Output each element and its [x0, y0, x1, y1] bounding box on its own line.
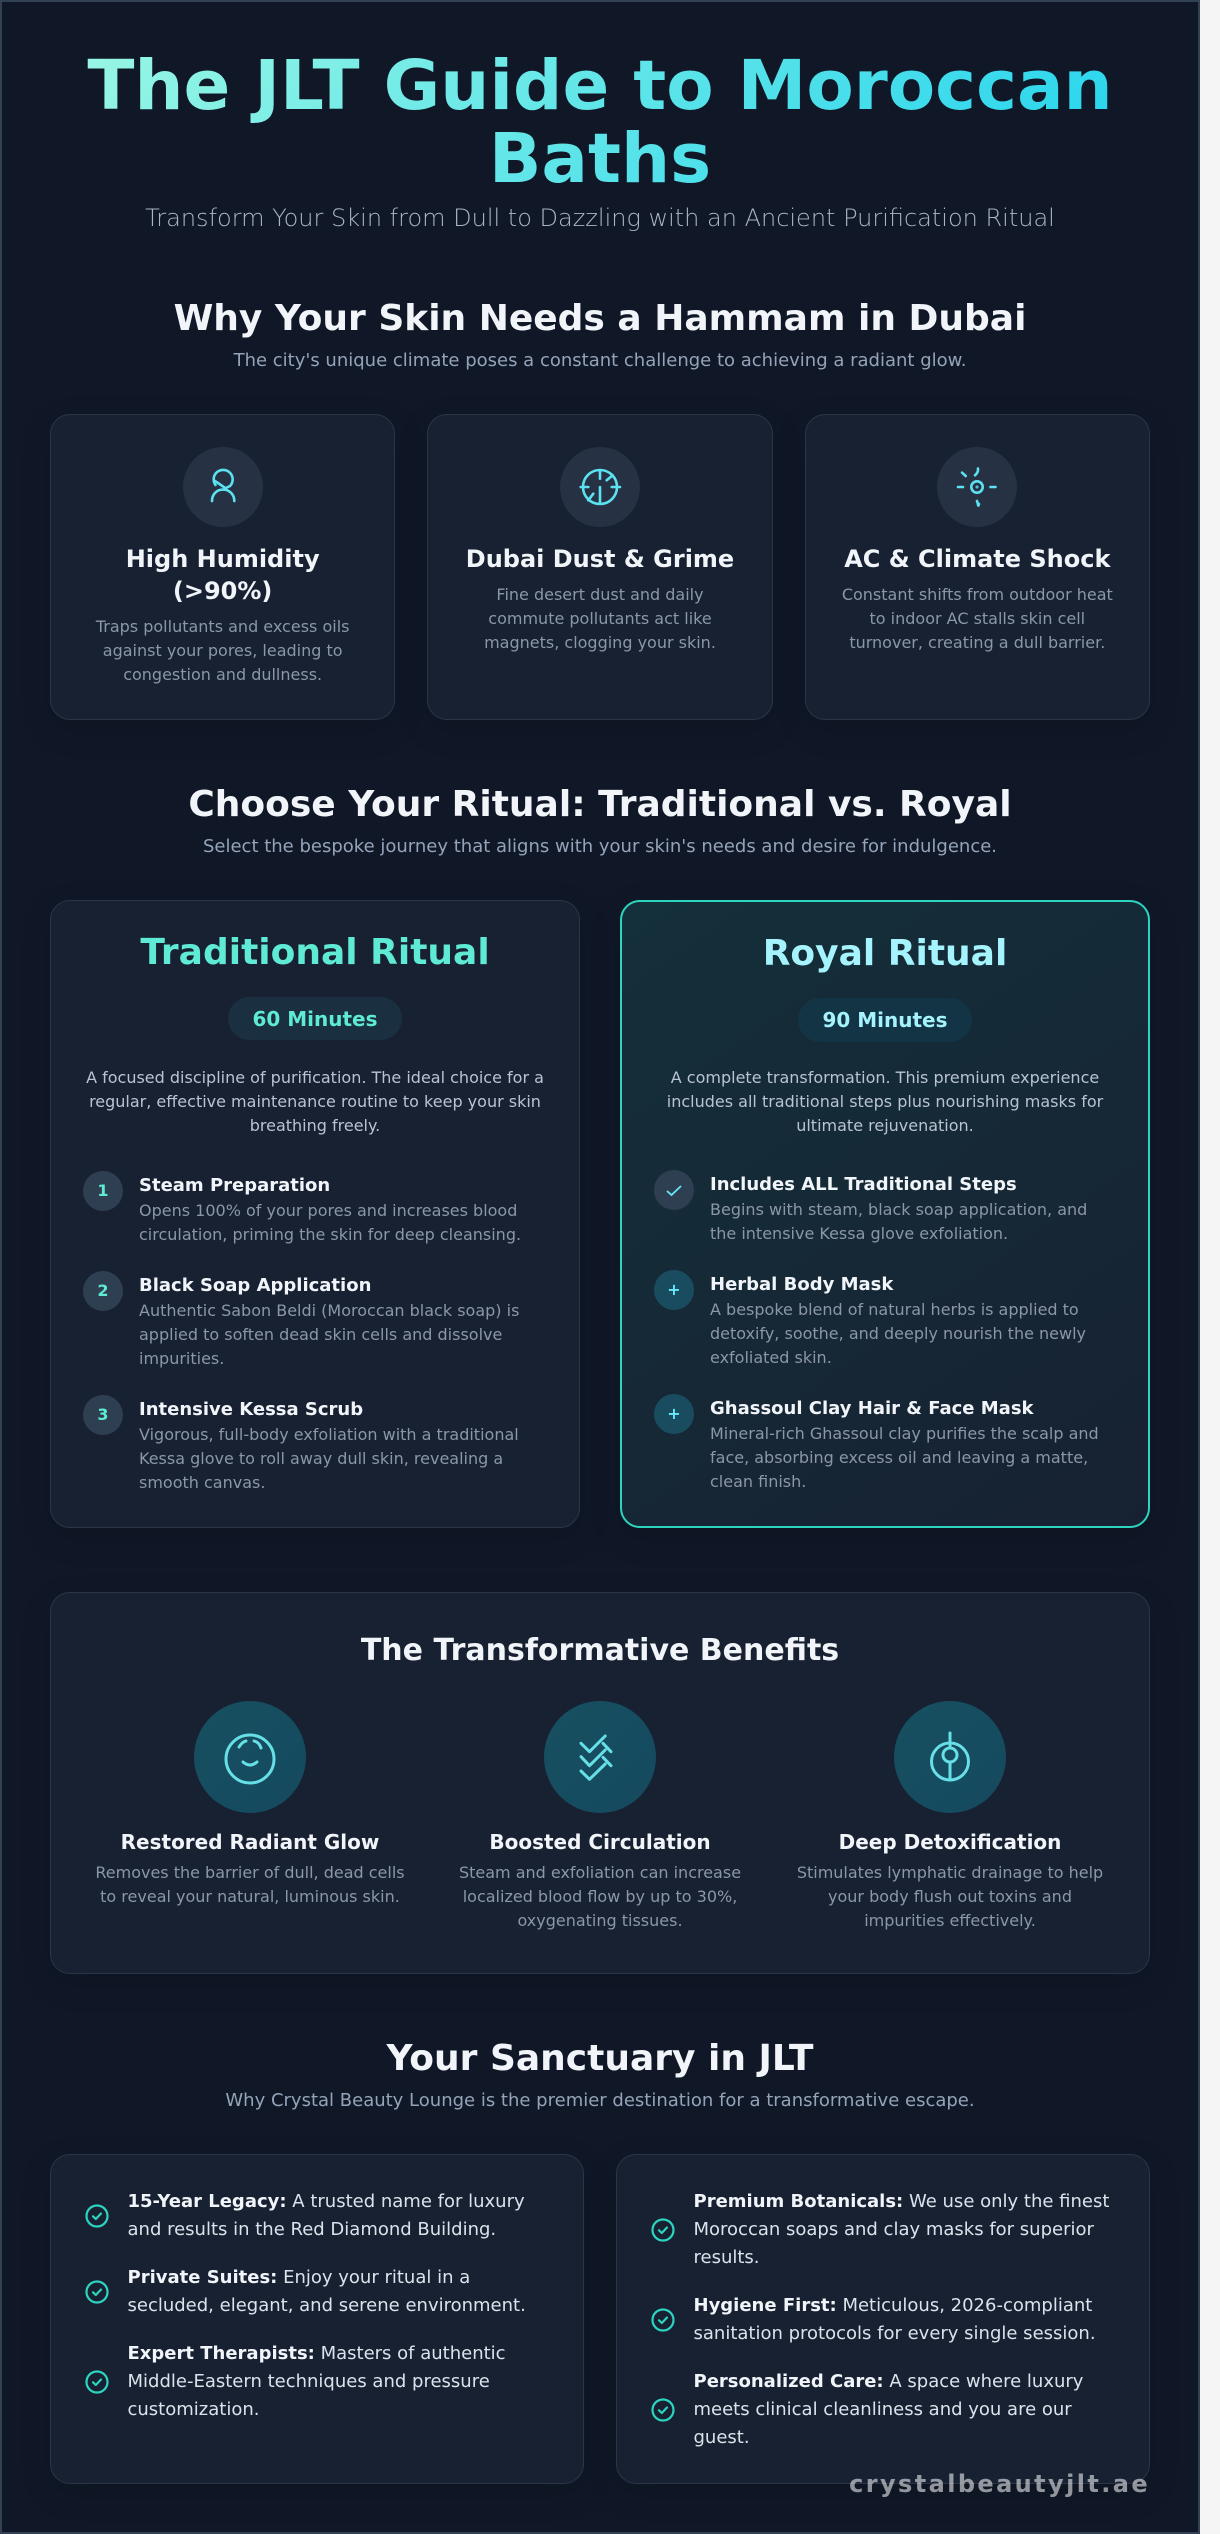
icon: plus: + — [667, 1280, 681, 1299]
benefit text: localized blood flow by up to 30%, — [463, 1887, 737, 1906]
heading: choose your ritual: Choose Your Ritual: Traditional vs. Royal — [188, 784, 1012, 825]
title: The JLT Guide to Moroccan — [87, 46, 1113, 126]
step text: impurities. — [139, 1349, 224, 1368]
item: personalized care: Personalized Care: A space where luxury — [694, 2371, 1083, 2392]
benefit title: Restored Radiant Glow — [121, 1830, 379, 1854]
icon: plus: + — [667, 1404, 681, 1423]
text: ac climate shock: Constant shifts from outdoor heat — [842, 585, 1113, 604]
step text — [710, 1424, 1099, 1491]
item: private suites: secluded, elegant, and serene environment. — [128, 2295, 526, 2316]
step text: exfoliated skin. — [710, 1348, 832, 1367]
item: hygiene first: Hygiene First: Meticulous, 2026-compliant — [694, 2295, 1092, 2316]
step title: Steam Preparation — [139, 1175, 330, 1196]
item: personalized care: meets clinical cleanliness and you are our — [694, 2399, 1072, 2420]
step: black soap — [83, 1271, 519, 1368]
item: expert therapists — [85, 2343, 506, 2420]
heading: high humidity: (>90%) — [173, 577, 272, 605]
heading: benefits: The Transformative Benefits — [361, 1633, 839, 1668]
subheading: sanctuary: Why Crystal Beauty Lounge is the premier destination for a transformative escape. — [225, 2090, 975, 2111]
step: kessa scrub — [83, 1395, 519, 1492]
step text — [139, 1301, 519, 1368]
text: high humidity: against your pores, leading to — [103, 641, 343, 660]
icon: check — [654, 1170, 694, 1210]
benefit text: oxygenating tissues. — [517, 1911, 683, 1930]
step text: applied to soften dead skin cells and dissolve — [139, 1325, 502, 1344]
panel: traditional ritual — [50, 900, 580, 1528]
text: dubai dust — [484, 585, 716, 652]
text: dubai dust: Fine desert dust and daily — [496, 585, 704, 604]
benefit title: Boosted Circulation — [489, 1830, 711, 1854]
step text — [139, 1425, 519, 1492]
icon: sun climate — [937, 447, 1017, 527]
icon: dust globe — [560, 447, 640, 527]
icon: face — [194, 1701, 306, 1813]
step: herbal body mask — [654, 1270, 1086, 1367]
text: dubai dust: magnets, clogging your skin. — [484, 633, 716, 652]
benefit: detox — [797, 1701, 1103, 1930]
text: royal description: A complete transformation. This premium experience — [671, 1068, 1099, 1087]
step text — [710, 1200, 1087, 1243]
step text — [710, 1300, 1086, 1367]
benefit text — [95, 1863, 405, 1906]
heading: traditional ritual: Traditional Ritual — [140, 932, 490, 973]
text: royal description — [667, 1068, 1104, 1135]
heading: why your skin needs a hammam: Why Your Skin Needs a Hammam in Dubai — [174, 298, 1026, 339]
item: expert therapists: Expert Therapists: Masters of authentic — [128, 2343, 506, 2364]
text: high humidity: congestion and dullness. — [123, 665, 322, 684]
step: includes all — [654, 1170, 1087, 1243]
icon: plus — [654, 1270, 694, 1310]
item: personalized care: guest. — [694, 2427, 750, 2448]
title — [80, 50, 1120, 196]
step title: Intensive Kessa Scrub — [139, 1399, 363, 1420]
subtitle: Transform Your Skin from Dull to Dazzling with an Ancient Purification Ritual — [145, 204, 1055, 232]
watermark: crystalbeautyjlt.ae — [849, 2470, 1150, 2498]
text: dubai dust: commute pollutants act like — [488, 609, 712, 628]
text: high humidity — [96, 617, 349, 684]
step text: smooth canvas. — [139, 1473, 265, 1492]
step text — [139, 1201, 521, 1244]
heading: royal ritual: Royal Ritual — [763, 933, 1007, 974]
panel: royal ritual — [620, 900, 1150, 1528]
item: hygiene first — [651, 2295, 1096, 2344]
title: Baths — [489, 119, 711, 199]
step title: Black Soap Application — [139, 1275, 371, 1296]
icon: chevrons — [544, 1701, 656, 1813]
panel: transformative benefits — [50, 1592, 1150, 1974]
item: personalized care — [651, 2371, 1083, 2448]
text: ac climate shock: turnover, creating a dull barrier. — [849, 633, 1105, 652]
icon: detox drop — [894, 1701, 1006, 1813]
step title: Ghassoul Clay Hair & Face Mask — [710, 1398, 1034, 1419]
panel: dubai dust — [427, 414, 773, 720]
benefit text: Stimulates lymphatic drainage to help — [797, 1863, 1103, 1882]
panel: sanctuary left list — [50, 2154, 584, 2484]
step text: the intensive Kessa glove exfoliation. — [710, 1224, 1008, 1243]
item: expert therapists: Middle-Eastern techniques and pressure — [128, 2371, 490, 2392]
step title: Includes ALL Traditional Steps — [710, 1174, 1017, 1195]
step text: face, absorbing excess oil and leaving a matte, — [710, 1448, 1088, 1467]
icon: humidity person — [183, 447, 263, 527]
item: legacy: and results in the Red Diamond Building. — [128, 2219, 496, 2240]
benefit text: impurities effectively. — [864, 1911, 1036, 1930]
badge: 60 minutes — [228, 997, 402, 1040]
heading: dubai dust: Dubai Dust & Grime — [466, 545, 734, 573]
heading: ac climate shock: AC & Climate Shock — [844, 545, 1110, 573]
number 3 — [83, 1395, 123, 1435]
step text: Mineral-rich Ghassoul clay purifies the scalp and — [710, 1424, 1099, 1443]
item: private suites — [85, 2267, 526, 2316]
text: high humidity: Traps pollutants and excess oils — [96, 617, 349, 636]
heading: sanctuary: Your Sanctuary in JLT — [387, 2038, 813, 2079]
item: private suites: Private Suites: Enjoy your ritual in a — [128, 2267, 470, 2288]
text: traditional description: regular, effective maintenance routine to keep your skin — [89, 1092, 541, 1111]
step: ghassoul mask — [654, 1394, 1099, 1491]
panel: ac climate shock — [805, 414, 1150, 720]
benefit text: to reveal your natural, luminous skin. — [100, 1887, 400, 1906]
subheading: climate: The city's unique climate poses a constant challenge to achieving a radiant glow. — [234, 350, 966, 371]
number 2: 2 — [97, 1281, 109, 1300]
number 3: 3 — [97, 1405, 109, 1424]
item: hygiene first: sanitation protocols for every single session. — [694, 2323, 1096, 2344]
benefit text — [459, 1863, 741, 1930]
benefit: circulation — [459, 1701, 741, 1930]
text: traditional description: A focused discipline of purification. The ideal choice for a — [86, 1068, 544, 1087]
benefit text — [797, 1863, 1103, 1930]
benefit text: Removes the barrier of dull, dead cells — [95, 1863, 405, 1882]
item: expert therapists: customization. — [128, 2399, 259, 2420]
number 1 — [83, 1171, 123, 1211]
step text: Vigorous, full-body exfoliation with a traditional — [139, 1425, 519, 1444]
heading: high humidity: High Humidity — [126, 545, 320, 573]
item: premium botanicals: Premium Botanicals: We use only the finest — [694, 2191, 1109, 2212]
icon: plus — [654, 1394, 694, 1434]
benefit text: your body flush out toxins and — [828, 1887, 1072, 1906]
badge: 60 minutes: 60 Minutes — [252, 1007, 378, 1031]
badge: 90 minutes — [798, 998, 972, 1042]
item: legacy: 15-Year Legacy: A trusted name for luxury — [128, 2191, 525, 2212]
text: traditional description — [86, 1068, 544, 1135]
panel: high humidity — [50, 414, 395, 720]
number 1: 1 — [97, 1181, 109, 1200]
step text: Kessa glove to roll away dull skin, revealing a — [139, 1449, 503, 1468]
item: premium botanicals — [651, 2191, 1109, 2268]
benefit text: Steam and exfoliation can increase — [459, 1863, 741, 1882]
badge: 90 minutes: 90 Minutes — [822, 1008, 948, 1032]
step text: Opens 100% of your pores and increases blood — [139, 1201, 517, 1220]
step text: A bespoke blend of natural herbs is applied to — [710, 1300, 1079, 1319]
step: steam preparation — [83, 1171, 521, 1244]
item: legacy — [85, 2191, 525, 2240]
heading: high humidity — [126, 545, 320, 605]
text: ac climate shock: to indoor AC stalls skin cell — [870, 609, 1085, 628]
text: traditional description: breathing freely. — [250, 1116, 380, 1135]
text: royal description: ultimate rejuvenation. — [796, 1116, 974, 1135]
text: ac climate shock — [842, 585, 1113, 652]
subheading: choose ritual: Select the bespoke journey that aligns with your skin's needs and desire for indulgence. — [203, 836, 997, 857]
step text: clean finish. — [710, 1472, 806, 1491]
step text: detoxify, soothe, and deeply nourish the newly — [710, 1324, 1086, 1343]
step text: circulation, priming the skin for deep cleansing. — [139, 1225, 521, 1244]
step title: Herbal Body Mask — [710, 1274, 893, 1295]
item: premium botanicals: Moroccan soaps and clay masks for superior — [694, 2219, 1094, 2240]
number 2 — [83, 1271, 123, 1311]
benefit title: Deep Detoxification — [839, 1830, 1061, 1854]
item: premium botanicals: results. — [694, 2247, 760, 2268]
step text: Authentic Sabon Beldi (Moroccan black soap) is — [139, 1301, 519, 1320]
step text: Begins with steam, black soap application, and — [710, 1200, 1087, 1219]
benefit: radiant glow — [95, 1701, 405, 1906]
text: royal description: includes all traditional steps plus nourishing masks for — [667, 1092, 1103, 1111]
panel: sanctuary right list — [616, 2154, 1150, 2484]
